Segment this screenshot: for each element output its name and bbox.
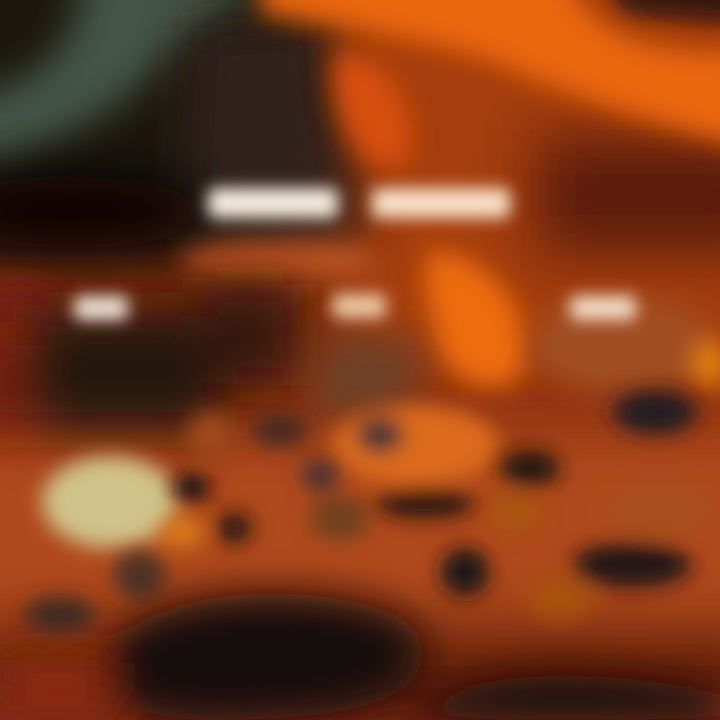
title (illegible, blurred) bbox=[208, 188, 510, 218]
black band left of the title bbox=[0, 176, 210, 248]
central bowl bbox=[331, 405, 499, 518]
left column heading (illegible, blurred) bbox=[74, 296, 128, 320]
centre column heading (illegible, blurred) bbox=[332, 294, 386, 318]
dark brown centre mass bbox=[180, 20, 365, 240]
orange flames bbox=[260, 0, 720, 387]
green-grey drape, top left bbox=[0, 0, 245, 170]
right column heading (illegible, blurred) bbox=[570, 296, 636, 320]
left dark panel bbox=[0, 285, 300, 430]
scattered food pieces bbox=[24, 390, 715, 633]
dark foreground shapes bbox=[0, 594, 720, 720]
warm band beneath the title bbox=[0, 240, 720, 393]
centre glass panel bbox=[315, 335, 415, 420]
cream plate at left bbox=[42, 456, 178, 548]
